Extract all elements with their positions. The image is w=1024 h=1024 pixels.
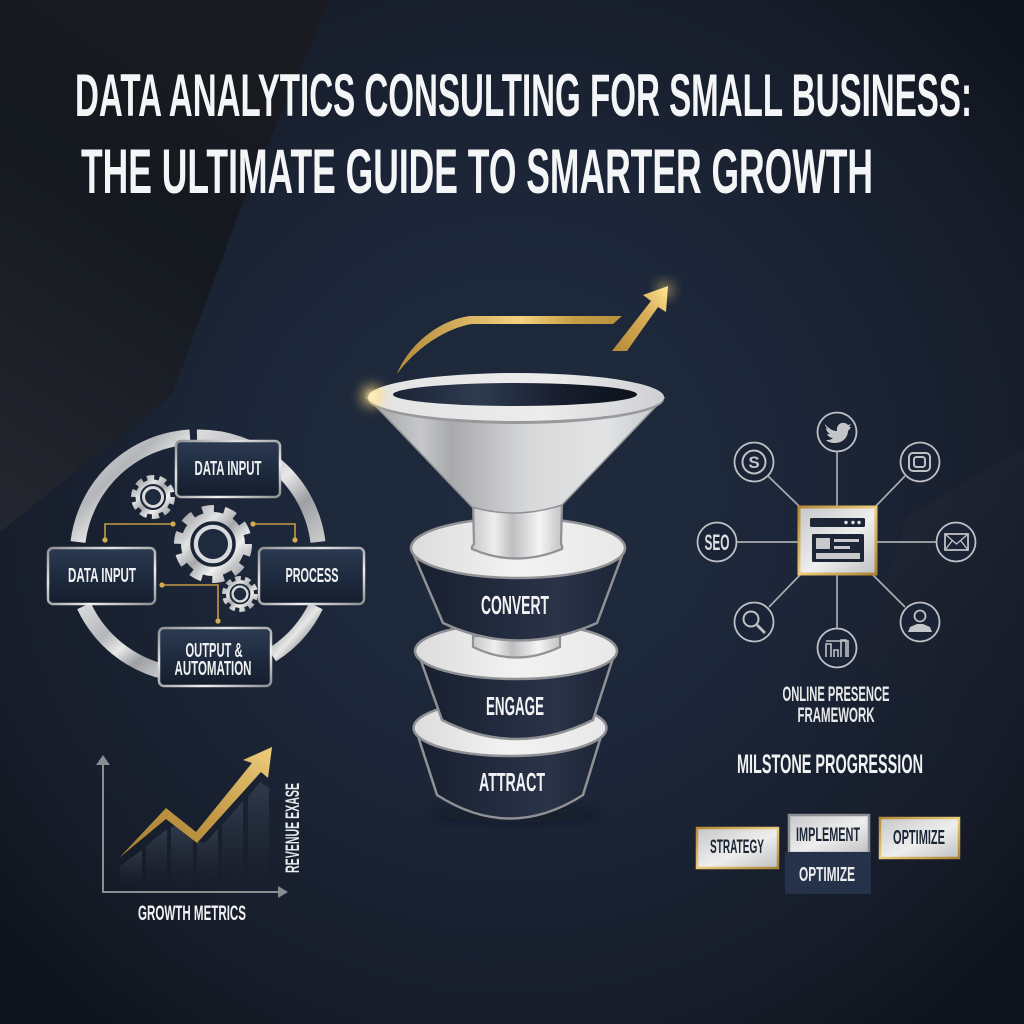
icon: seo: SEO bbox=[704, 530, 730, 555]
icon: seo bbox=[698, 522, 736, 562]
tier: engage: ENGAGE bbox=[486, 691, 544, 721]
icon: twitter bbox=[818, 412, 856, 452]
panel: funnel bbox=[361, 282, 673, 822]
box: data input top: DATA INPUT bbox=[194, 458, 262, 480]
cycle ring bbox=[78, 437, 318, 672]
icon: search bbox=[734, 602, 774, 642]
icon: dollar: S bbox=[748, 453, 760, 472]
tier: engage bbox=[415, 623, 617, 739]
funnel cone bbox=[368, 398, 664, 513]
icon: mail bbox=[936, 522, 976, 562]
growth arrow bbox=[119, 747, 272, 858]
framework caption bbox=[782, 683, 890, 727]
chart bars bbox=[120, 782, 269, 888]
icon: person bbox=[900, 602, 940, 642]
framework caption: FRAMEWORK bbox=[798, 704, 874, 727]
milestone: strategy: STRATEGY bbox=[710, 837, 764, 858]
milestone: implement bbox=[789, 815, 869, 853]
title bbox=[75, 62, 972, 207]
framework caption: ONLINE PRESENCE bbox=[782, 683, 890, 706]
chart caption: GROWTH METRICS bbox=[138, 902, 246, 925]
rim glow bbox=[361, 385, 383, 407]
icon: bar chart bbox=[818, 628, 856, 668]
panel: growth chart bbox=[96, 747, 304, 925]
icon: camera bbox=[900, 442, 940, 482]
tier: attract: ATTRACT bbox=[479, 767, 545, 797]
gear: small lower bbox=[224, 578, 256, 610]
gear: small upper bbox=[134, 478, 172, 516]
tier: attract bbox=[414, 700, 606, 818]
funnel neck bbox=[472, 505, 562, 558]
axes bbox=[96, 755, 288, 898]
panel: data cycle diagram bbox=[48, 437, 364, 686]
milestone: optimize dark bbox=[785, 852, 871, 894]
milestone: strategy bbox=[697, 828, 778, 868]
axis label: revenue: REVENUE EXASE bbox=[283, 783, 304, 873]
box: process: PROCESS bbox=[286, 565, 338, 587]
box: output and automation: OUTPUT & bbox=[186, 640, 242, 662]
gear: large bbox=[178, 510, 248, 578]
box: output and automation: AUTOMATION bbox=[174, 658, 252, 680]
gold arrow bbox=[612, 282, 673, 351]
funnel rim bbox=[368, 373, 664, 424]
panel: milestone progression bbox=[697, 749, 959, 894]
shadow bbox=[430, 808, 600, 822]
tier: convert bbox=[411, 518, 625, 640]
panel: online presence framework bbox=[698, 412, 976, 727]
box: process bbox=[259, 548, 364, 604]
milestone: optimize dark: OPTIMIZE bbox=[799, 864, 855, 886]
milestone: implement: IMPLEMENT bbox=[796, 825, 860, 846]
box: data input left bbox=[48, 548, 155, 604]
box: output and automation bbox=[159, 628, 271, 686]
gold swoosh bbox=[397, 316, 622, 374]
milestone: optimize light bbox=[880, 818, 959, 858]
connector lines bbox=[737, 452, 936, 628]
tier: convert: CONVERT bbox=[481, 590, 549, 620]
icon: dollar bbox=[734, 442, 774, 482]
box: data input top bbox=[176, 441, 280, 497]
central website icon bbox=[799, 507, 876, 574]
milestone: optimize light: OPTIMIZE bbox=[893, 827, 945, 849]
box: data input left: DATA INPUT bbox=[68, 565, 136, 587]
gold connector lines bbox=[102, 521, 298, 624]
